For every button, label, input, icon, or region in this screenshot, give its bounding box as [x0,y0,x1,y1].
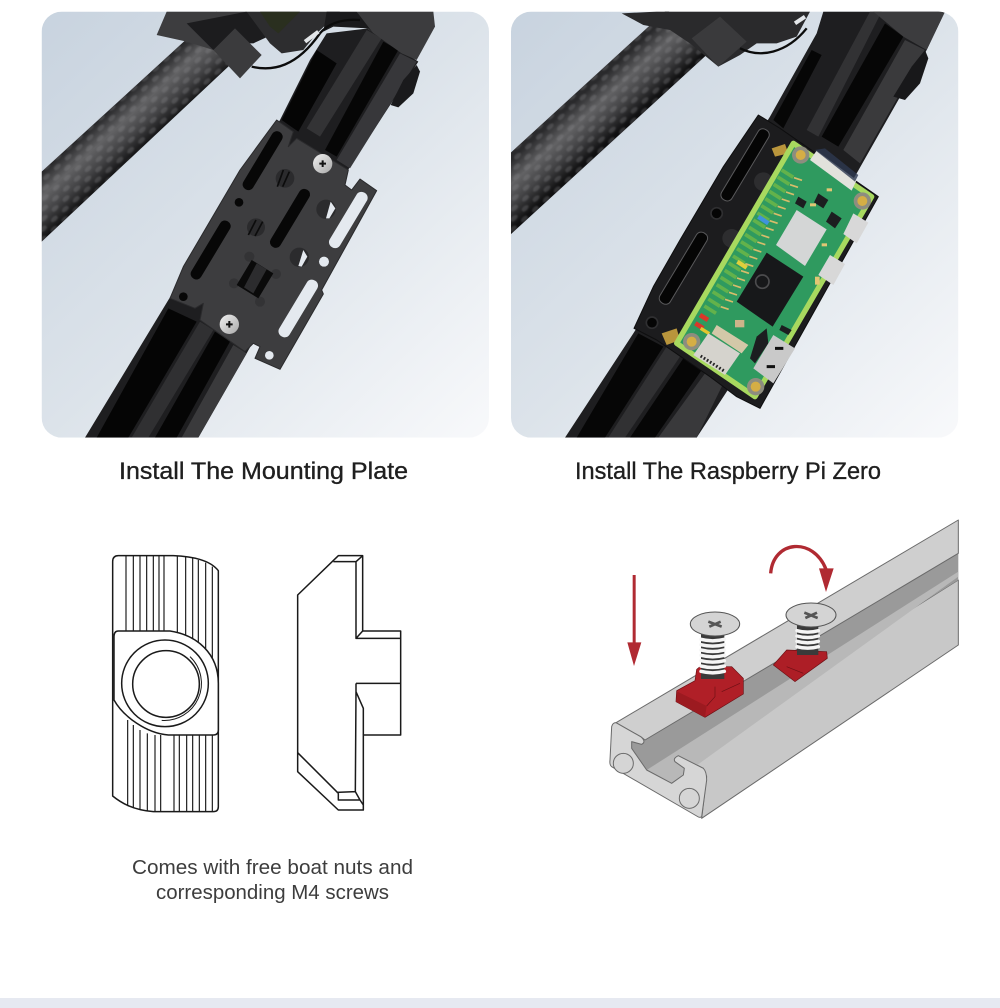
line drawing: boat nut front view [113,556,218,812]
screw top [313,154,332,173]
aluminium rail [85,28,420,438]
header pins [695,170,802,334]
boat nut right [773,650,827,682]
carbon fibre tube [510,10,717,235]
screw right [786,603,836,655]
small components [750,193,842,363]
gold screws [683,146,871,395]
illustration: t-slot rail with boat nuts and screws [610,520,958,818]
top bracket and cables [622,12,810,67]
aluminium rail [565,12,945,438]
caption: free boat nuts and screws [132,856,413,904]
mounting plate [634,115,878,408]
caption: free boat nuts and screws: Comes with free boat nuts and [132,856,413,879]
bottom band [0,998,1000,1008]
arrow: down [627,575,641,666]
screw left [690,612,740,679]
rail body [610,520,958,818]
carbon fibre tube [42,12,247,242]
line drawing: boat nut side view [298,556,401,810]
dark slots [179,129,312,301]
ports and connectors [693,148,868,383]
black chip with logo [737,253,803,327]
panel: install the mounting plate photo [42,12,489,438]
boat nut left [676,667,743,717]
light cut-outs [265,190,370,360]
top bracket and cables [157,12,435,78]
mounting plate [170,120,377,369]
panel: install the raspberry pi zero photo [510,10,958,438]
heading: install the mounting plate: Install The Mounting Plate [119,458,408,485]
heading: install the raspberry pi zero: Install The Raspberry Pi Zero [575,458,881,485]
silver processor [776,210,827,266]
caption: free boat nuts and screws: corresponding M4 screws [156,881,389,904]
arrow: rotate clockwise [771,547,834,592]
raspberry pi zero board [677,143,872,397]
screw bottom [220,315,239,334]
centre cut-out [229,252,281,307]
brass standoffs [662,144,788,345]
round holes [247,169,336,267]
